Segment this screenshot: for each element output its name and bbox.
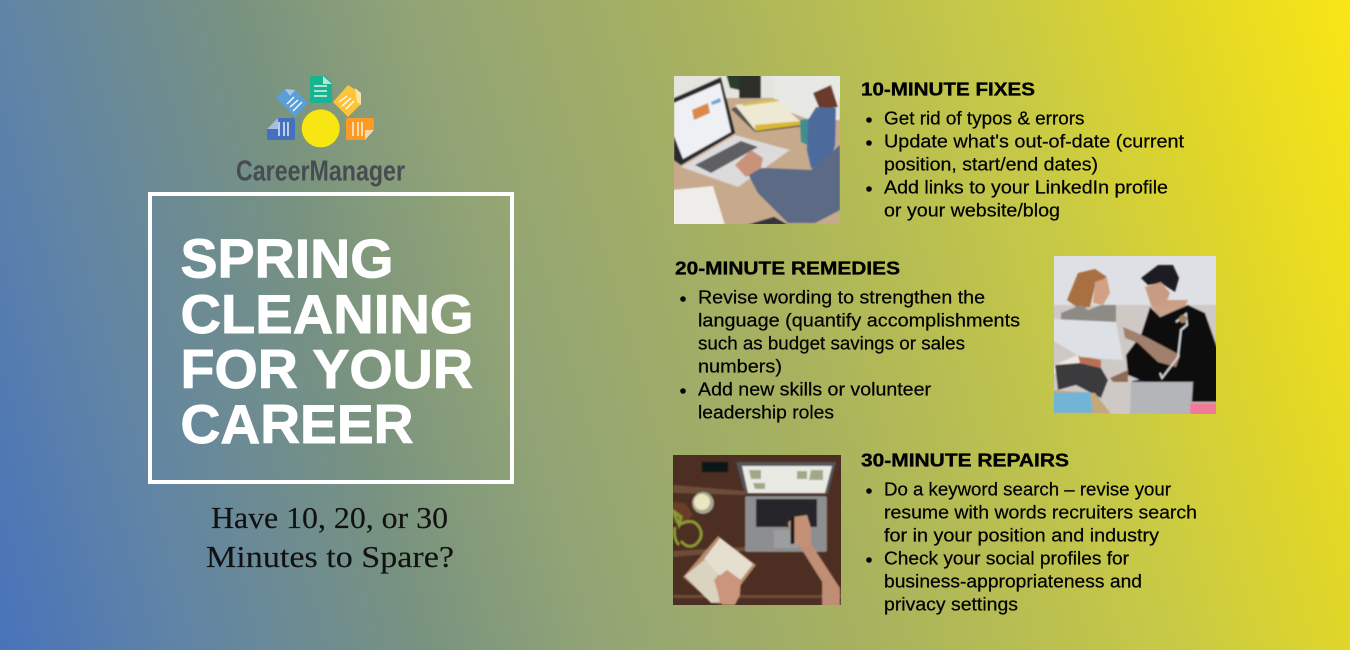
bullet list: resume with words recruiters search	[884, 502, 1197, 522]
icon: dark blue document	[267, 118, 295, 140]
photo: two women reviewing a document	[1054, 256, 1216, 414]
title: CLEANING	[180, 283, 474, 345]
bullet list: language (quantify accomplishments	[698, 310, 1020, 330]
title: CAREER	[180, 393, 414, 455]
bullet list: business-appropriateness and	[884, 572, 1142, 592]
bullet list	[866, 480, 1197, 614]
heading: 20-MINUTE REMEDIES	[675, 259, 900, 279]
bullet list: Check your social profiles for	[884, 548, 1129, 568]
bullet list: leadership roles	[698, 402, 834, 422]
bullet list: for in your position and industry	[884, 526, 1159, 546]
bullet list: Update what's out-of-date (current	[884, 132, 1184, 152]
subtitle	[206, 501, 454, 574]
photo: laptop on desk	[674, 76, 840, 224]
subtitle: Minutes to Spare?	[206, 540, 454, 574]
title	[180, 230, 474, 455]
bullet list: Revise wording to strengthen the	[698, 288, 985, 308]
section: 30-minute repairs	[861, 451, 1197, 615]
bullet list: such as budget savings or sales	[698, 334, 965, 354]
bullet list	[866, 108, 1184, 220]
bullet list: Do a keyword search – revise your	[884, 480, 1171, 500]
bullet list: or your website/blog	[884, 200, 1060, 220]
icon: yellow sun circle	[302, 109, 340, 147]
title: FOR YOUR	[180, 338, 473, 400]
icon: yellow document	[333, 85, 361, 117]
bullet list: Add new skills or volunteer	[698, 380, 931, 400]
icon: teal document	[310, 76, 332, 103]
heading: 10-MINUTE FIXES	[861, 80, 1035, 100]
bullet list: Get rid of typos & errors	[884, 108, 1084, 128]
photo: overhead laptop on wooden desk	[673, 455, 841, 605]
icon: light blue document	[276, 89, 308, 117]
bullet list	[680, 288, 1020, 422]
section: 10-minute fixes	[861, 80, 1184, 221]
bullet list: numbers)	[698, 356, 782, 376]
title panel	[148, 192, 514, 484]
heading: 30-MINUTE REPAIRS	[861, 451, 1069, 471]
logo: CareerManager	[236, 76, 405, 188]
bullet list: position, start/end dates)	[884, 154, 1098, 174]
section: 20-minute remedies	[675, 259, 1020, 423]
icon: orange document	[346, 118, 374, 140]
bullet list: Add links to your LinkedIn profile	[884, 178, 1168, 198]
bullet list: privacy settings	[884, 594, 1018, 614]
subtitle: Have 10, 20, or 30	[211, 501, 448, 535]
